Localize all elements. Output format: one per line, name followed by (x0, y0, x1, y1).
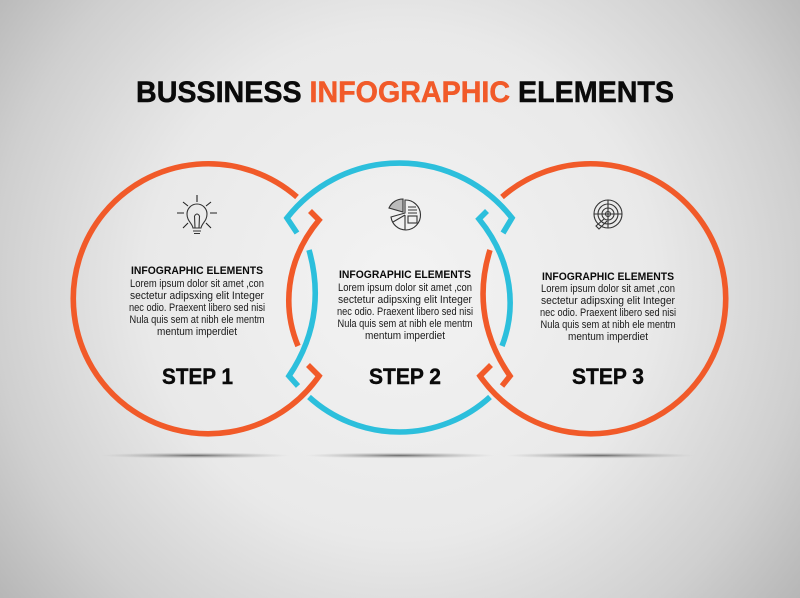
text block: step 3: INFOGRAPHIC ELEMENTS (542, 271, 674, 283)
step 2 label: STEP 2 (369, 364, 441, 389)
text block: step 3 (540, 271, 676, 343)
text block: step 2: Lorem ipsum dolor sit amet ,con (338, 282, 472, 294)
circle 2 blue ring (287, 163, 512, 432)
text block: step 1: Nula quis sem at nibh ele mentm (130, 314, 264, 326)
step 1 label: STEP 1 (162, 364, 233, 389)
title: BUSSINESS INFOGRAPHIC ELEMENTS (136, 76, 674, 109)
icon: light bulb (177, 195, 217, 234)
text block: step 1 (129, 265, 265, 338)
text block: step 2: INFOGRAPHIC ELEMENTS (339, 269, 471, 281)
circle 1 orange ring (73, 164, 319, 434)
text block: step 2: nec odio. Praexent libero sed nisi (337, 306, 473, 318)
text block: step 1: sectetur adipsxing elit Integer (130, 290, 264, 302)
text block: step 2: Nula quis sem at nibh ele mentm (338, 318, 472, 330)
text block: step 3: mentum imperdiet (568, 331, 648, 343)
icon: pie chart (389, 199, 420, 230)
text block: step 1: nec odio. Praexent libero sed nisi (129, 302, 265, 314)
text block: step 3: nec odio. Praexent libero sed nisi (540, 307, 676, 319)
text block: step 3: Lorem ipsum dolor sit amet ,con (541, 283, 675, 295)
circle 3 orange ring (480, 164, 726, 434)
text block: step 3: sectetur adipsxing elit Integer (541, 295, 675, 307)
text block: step 1: INFOGRAPHIC ELEMENTS (131, 265, 263, 277)
text block: step 1: Lorem ipsum dolor sit amet ,con (130, 278, 264, 290)
text block: step 2: mentum imperdiet (365, 330, 445, 342)
text block: step 2: sectetur adipsxing elit Integer (338, 294, 472, 306)
step 3 label: STEP 3 (572, 364, 644, 389)
text block: step 1: mentum imperdiet (157, 326, 237, 338)
icon: target (594, 200, 622, 229)
text block: step 2 (337, 269, 473, 342)
circle shadows (100, 452, 695, 458)
text block: step 3: Nula quis sem at nibh ele mentm (540, 319, 676, 331)
